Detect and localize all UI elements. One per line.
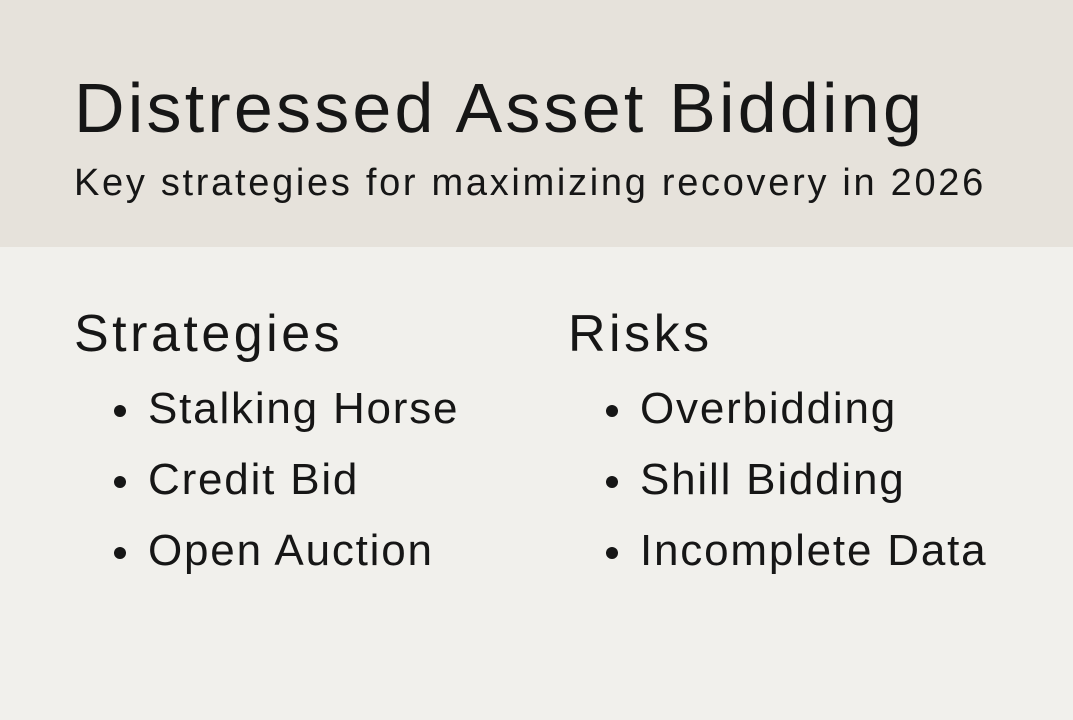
- title: Distressed Asset Bidding: [74, 69, 925, 147]
- heading: strategies: Strategies: [74, 305, 343, 363]
- list: strategies: Credit Bid: [148, 455, 359, 504]
- list: strategies: Stalking Horse: [148, 384, 459, 433]
- header band: [0, 0, 1073, 247]
- subtitle: Key strategies for maximizing recovery in 2026: [74, 162, 986, 204]
- list: strategies: [114, 384, 459, 575]
- list: risks: Overbidding: [640, 384, 897, 433]
- list: risks: [606, 384, 987, 575]
- heading: risks: Risks: [568, 305, 713, 363]
- list: strategies: Open Auction: [148, 526, 434, 575]
- list: risks: Shill Bidding: [640, 455, 906, 504]
- list: risks: Incomplete Data: [640, 526, 987, 575]
